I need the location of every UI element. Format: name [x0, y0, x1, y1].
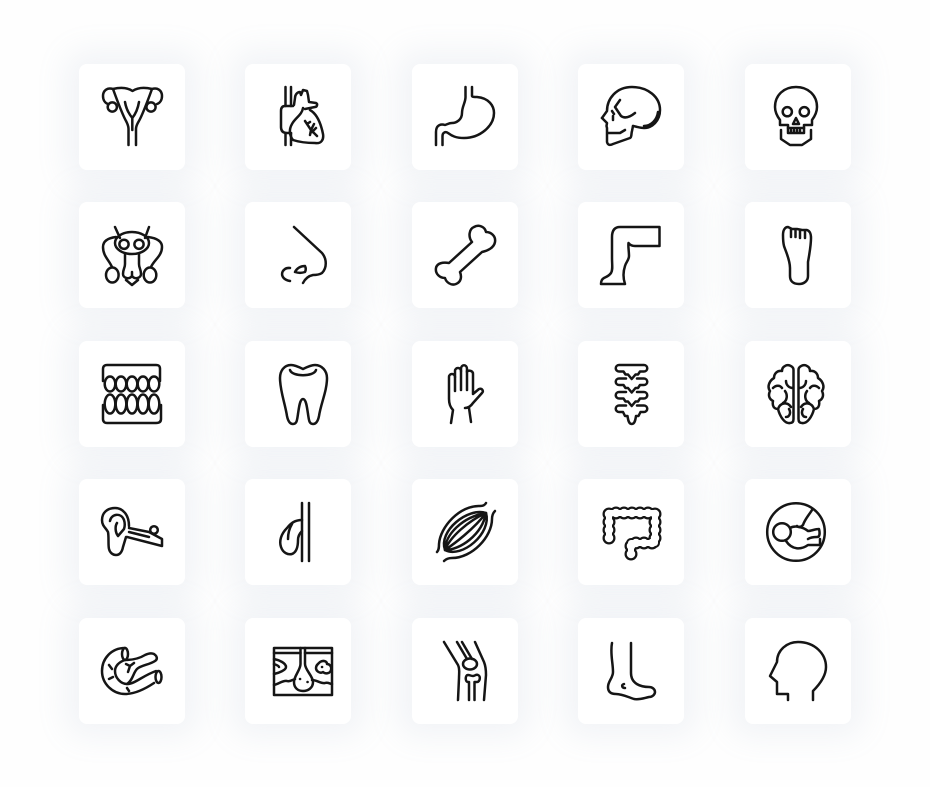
icon: skin layers	[272, 646, 334, 696]
card: stomach	[412, 64, 518, 170]
icon: heart	[280, 86, 324, 146]
card: gallbladder	[245, 479, 351, 585]
card: hand	[412, 341, 518, 447]
card: heart	[245, 64, 351, 170]
icon: nose	[280, 226, 327, 284]
card: uterus	[79, 64, 185, 170]
card: skull side view	[578, 64, 684, 170]
icon: molar tooth	[278, 364, 328, 426]
card: knee joint	[412, 618, 518, 724]
card: pancreas	[79, 618, 185, 724]
icon: head profile	[768, 640, 828, 702]
card: bone	[412, 202, 518, 308]
card: foot sole	[744, 202, 850, 308]
card: ear	[79, 479, 185, 585]
card: skin layers	[245, 618, 351, 724]
card: nose	[245, 202, 351, 308]
icon: muscle	[436, 502, 496, 562]
icon: fetus	[766, 502, 826, 562]
card: skull front view	[744, 64, 850, 170]
card: fetus	[744, 479, 850, 585]
icon: foot sole	[782, 226, 812, 286]
icon: skull front view	[774, 86, 818, 146]
icon: teeth	[102, 364, 162, 424]
card: head profile	[744, 618, 850, 724]
icon: knee joint	[442, 640, 488, 702]
icon: foot side view	[606, 642, 656, 700]
icon: ear	[100, 506, 164, 556]
icon: bone	[434, 224, 496, 286]
card: leg and knee	[578, 202, 684, 308]
icon: large intestine	[602, 506, 662, 560]
card: male reproductive system	[79, 202, 185, 308]
card: muscle	[412, 479, 518, 585]
card: teeth	[79, 341, 185, 447]
icon: gallbladder	[279, 502, 310, 562]
icon: leg and knee	[600, 226, 661, 286]
card: molar tooth	[245, 341, 351, 447]
icon: skull side view	[600, 86, 662, 146]
icon: stomach	[434, 86, 496, 146]
icon: pancreas	[100, 646, 163, 696]
card: brain	[744, 341, 850, 447]
icon: hand	[448, 364, 484, 424]
card: spine	[578, 341, 684, 447]
icon: uterus	[102, 86, 164, 146]
icon: male reproductive system	[102, 226, 164, 286]
icon: brain	[767, 364, 825, 424]
icon: spine	[614, 364, 648, 426]
card: large intestine	[578, 479, 684, 585]
card: foot side view	[578, 618, 684, 724]
